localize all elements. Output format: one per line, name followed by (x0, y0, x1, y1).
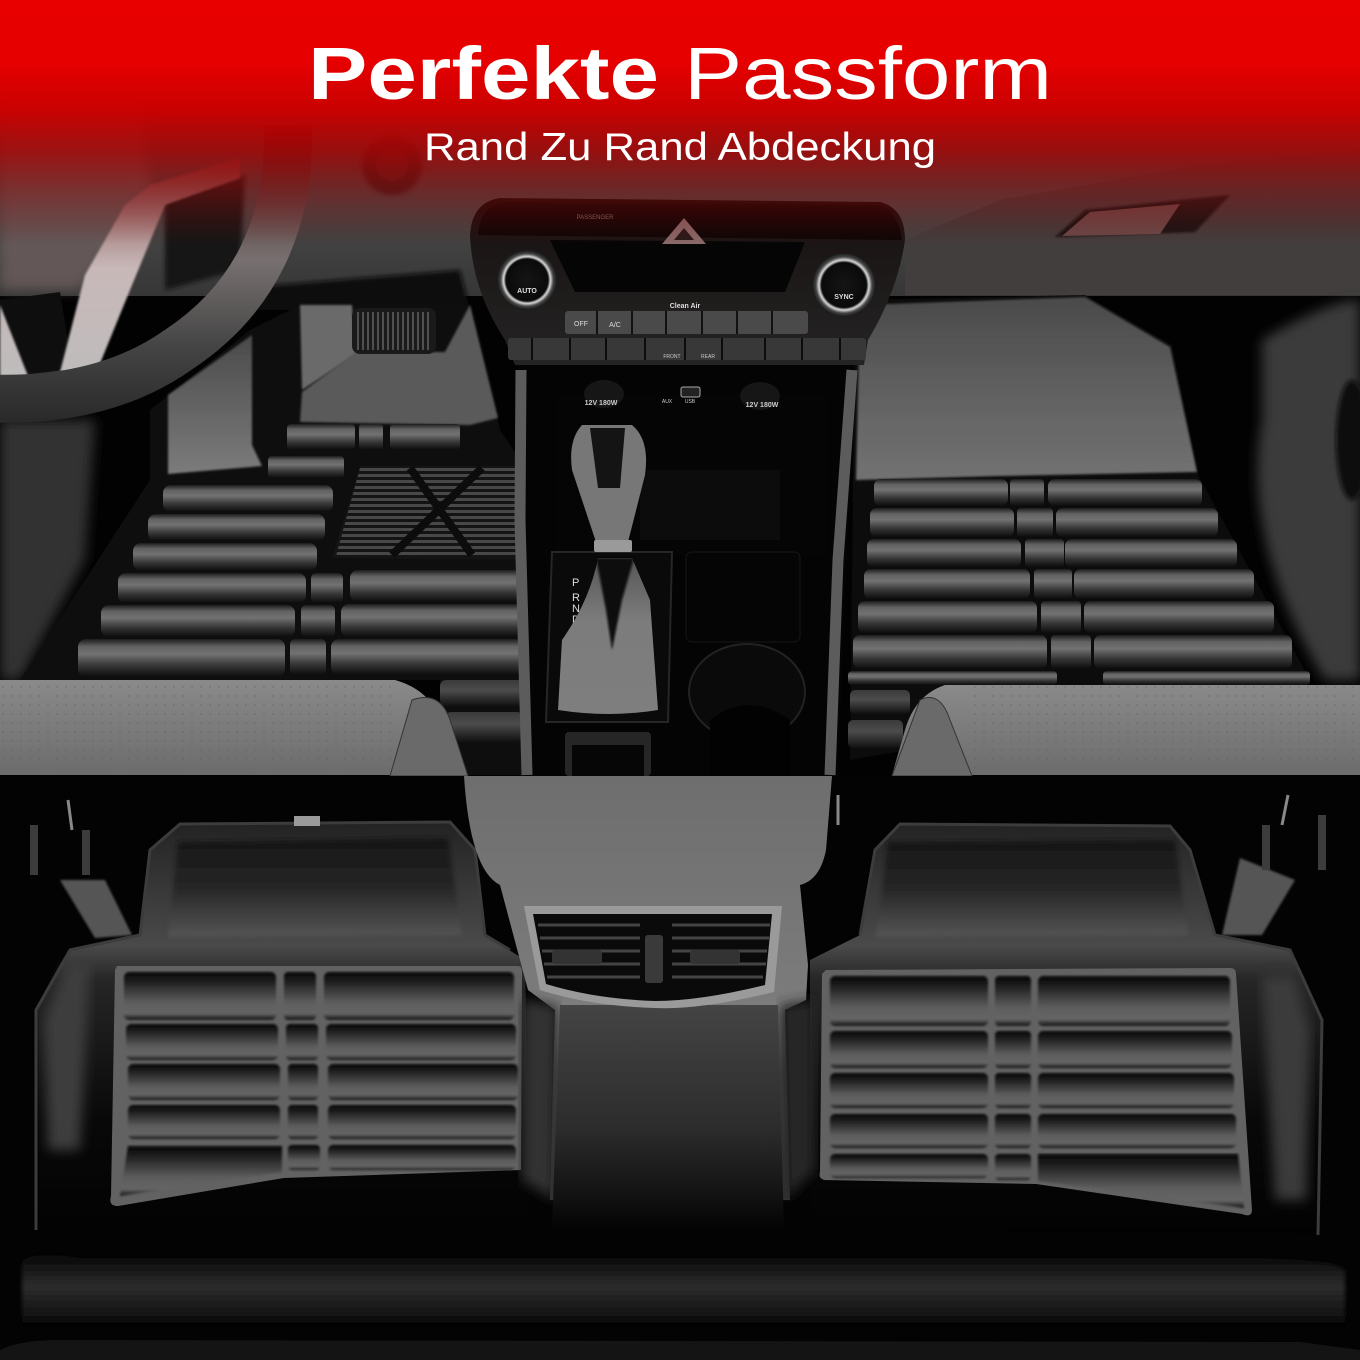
rear right mat (810, 824, 1322, 1235)
center console: 12V 180W (585, 400, 618, 407)
center console: AUTO (517, 288, 537, 295)
left ribs (874, 479, 1008, 506)
center console: AUX (662, 399, 673, 405)
center console (470, 198, 905, 410)
storage tray (556, 395, 828, 555)
front left seat (0, 680, 468, 776)
climate buttons: OFF (574, 321, 588, 328)
left flange sheen (44, 960, 90, 1150)
center tunnel: P (572, 577, 579, 589)
shift knob (571, 425, 646, 542)
rib frame (110, 966, 522, 1206)
tunnel trims (520, 370, 852, 775)
right knob (812, 253, 876, 317)
rib frame (820, 968, 1252, 1215)
shift boot (558, 558, 658, 714)
cup holder (689, 644, 805, 740)
pedal floor (300, 305, 498, 425)
gloss bar (478, 202, 902, 240)
rear left door sill (30, 800, 132, 938)
right flange sheen (1262, 975, 1310, 1200)
lower buttons: REAR (701, 354, 715, 360)
front right mat (848, 295, 1310, 760)
title: Passform (684, 32, 1052, 115)
climate buttons: A/C (609, 322, 621, 329)
airbag label: PASSENGER (577, 215, 614, 221)
steering wheel (0, 125, 288, 399)
upper panel (856, 297, 1197, 480)
climate buttons (565, 311, 808, 334)
air vent (524, 906, 782, 1008)
right ribs (350, 570, 524, 602)
right door recess (1336, 380, 1360, 500)
rear right door sill (838, 795, 1326, 935)
center console: USB (685, 399, 696, 405)
center tunnel: R (572, 592, 580, 604)
power outlets (584, 380, 624, 408)
ribs (830, 976, 1244, 1208)
left wall panel (168, 335, 262, 474)
lower tray (565, 732, 651, 776)
subtitle: Rand Zu Rand Abdeckung (424, 126, 936, 169)
clip (294, 816, 320, 826)
left ribs (163, 485, 333, 512)
middle ribs (311, 573, 343, 603)
right ribs (1048, 479, 1202, 506)
title: Perfekte (308, 32, 659, 115)
storage bin (686, 552, 800, 642)
center tunnel: N (572, 603, 580, 615)
right door panel (1257, 300, 1360, 680)
ribs (120, 972, 518, 1196)
center tunnel: D (572, 614, 580, 626)
hazard button (662, 218, 706, 244)
pedal wall (300, 305, 356, 390)
heel plate (332, 466, 518, 560)
center console: 12V 180W (746, 402, 779, 409)
upper ribs (287, 424, 355, 450)
rear center console (464, 776, 832, 1230)
center console: SYNC (834, 294, 854, 301)
side sheen (522, 1000, 558, 1200)
screen recess (550, 240, 805, 292)
rear left mat (36, 816, 530, 1230)
dashboard (0, 0, 1360, 310)
rear seat edge (0, 1340, 1360, 1360)
center tunnel (518, 365, 855, 776)
rear floor strip (22, 1255, 1345, 1325)
tunnel panel (552, 1005, 784, 1230)
clean air label: Clean Air (670, 303, 701, 310)
title (308, 32, 1052, 115)
front right seat (892, 685, 1360, 776)
shift gate (546, 552, 672, 722)
left door panel (0, 420, 95, 680)
red gradient overlay (0, 0, 1360, 245)
middle ribs (1010, 479, 1044, 506)
pedal (352, 308, 436, 354)
front left mat (20, 305, 525, 775)
top step (168, 838, 462, 937)
lower buttons: FRONT (663, 354, 681, 360)
top step (876, 840, 1188, 937)
rear section background (0, 776, 1360, 1360)
left knob (497, 250, 557, 310)
lower buttons (508, 338, 866, 360)
